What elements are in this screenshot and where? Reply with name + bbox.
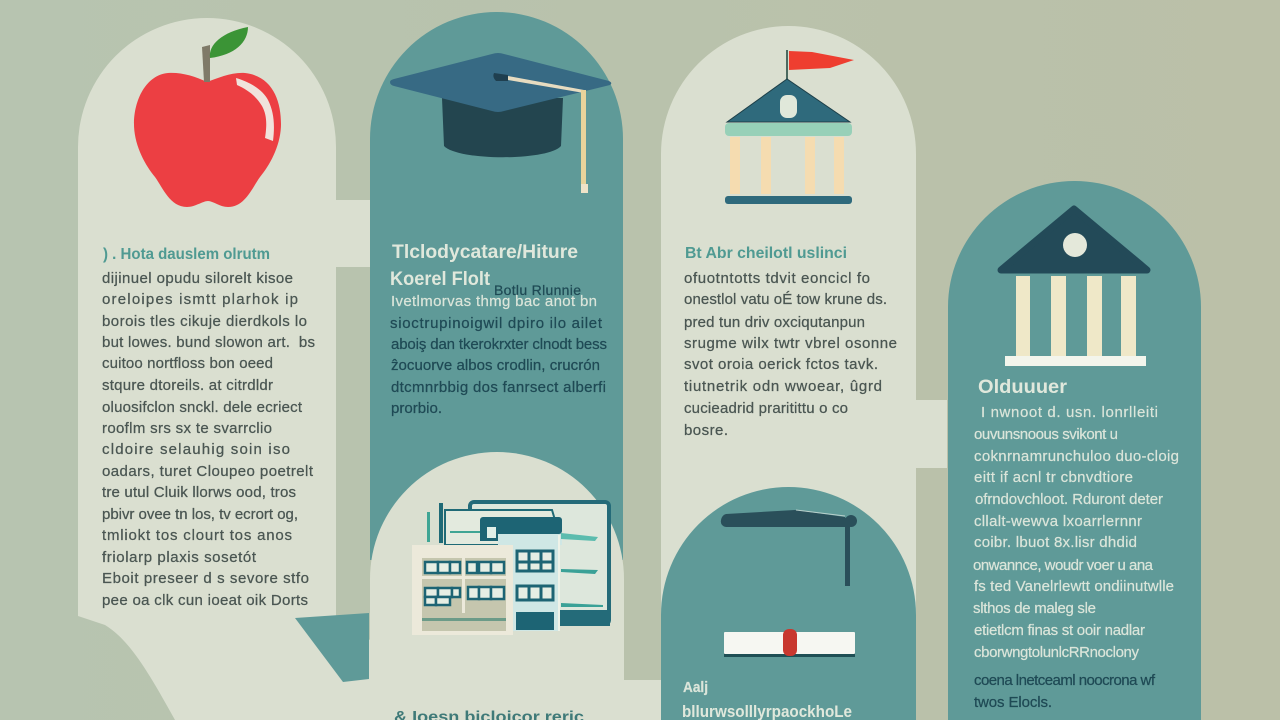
text block: apple column: oadars, turet Cloupeo poetrelt xyxy=(102,463,314,480)
text block: temple column xyxy=(973,404,1179,711)
text block: graduation cap column: aboiş dan tkerokrxter clnodt bess xyxy=(391,336,607,353)
text block: temple column: ofrndovchloot. Rduront deter xyxy=(975,491,1163,508)
text block: bank building column: bosre. xyxy=(684,422,728,439)
text block: temple column: ouvunsnoous svikont u xyxy=(974,426,1118,443)
text block: apple column: tmliokt tos clourt tos anos xyxy=(102,527,292,544)
arrow: teal fold xyxy=(295,613,369,682)
text block: bank building column: onestlol vatu oÉ tow krune ds. xyxy=(684,291,887,308)
text block: apple column: oreloipes ismtt plarhok ip xyxy=(102,291,298,308)
icon: graduation cap xyxy=(390,53,611,193)
icon: building with flag xyxy=(725,50,854,204)
text block: temple column: coibr. lbuot 8x.lisr dhdid xyxy=(974,534,1137,551)
panel: graduation cap column xyxy=(370,12,623,560)
text block: diploma card xyxy=(682,679,852,720)
text block: apple column: dijinuel opudu silorelt kisoe xyxy=(102,270,293,287)
text block: bank building column: pred tun driv oxciqutanpun xyxy=(684,314,865,331)
text block: temple column: onwannce, woudr voer u ana xyxy=(973,557,1154,574)
text block: apple column: Eboit preseer d s sevore stfo xyxy=(102,570,309,587)
text block: graduation cap column xyxy=(390,282,607,417)
text block: apple column: but lowes. bund slowon art. bs xyxy=(102,334,315,351)
text block: bank building column xyxy=(684,270,897,439)
heading: graduation cap column: Tlclodycatare/Hiture xyxy=(392,242,578,263)
text block: temple column: coena lnetceaml noocrona wf xyxy=(974,672,1156,689)
heading: temple column: Olduuuer xyxy=(978,377,1068,398)
text block: graduation cap column: Botlu Rlunnie xyxy=(494,282,581,298)
text block: temple column: cllalt-wewva lxoarrlernnr xyxy=(974,513,1142,530)
text block: graduation cap column: Ivetlmorvas thmg bac anot bn xyxy=(391,293,597,310)
icon: school and screen xyxy=(412,502,610,635)
icon: apple xyxy=(134,27,281,207)
panel: school card xyxy=(370,452,624,720)
text block: apple column xyxy=(102,270,315,609)
text block: apple column: tre utul Cluik llorws ood, tros xyxy=(102,484,296,501)
panel: diploma card xyxy=(661,487,916,720)
text block: apple column: rooflm srs sx te svarrclio xyxy=(102,420,272,437)
icon: temple xyxy=(1001,209,1147,366)
text block: graduation cap column: sioctrupinoigwil dpiro ilo ailet xyxy=(390,315,603,332)
panel: temple column xyxy=(948,181,1201,720)
text block: temple column: cborwngtolunlcRRnoclony xyxy=(974,644,1140,661)
heading: graduation cap column xyxy=(390,242,578,290)
heading: bank building column: Bt Abr cheilotl uslinci xyxy=(685,245,847,262)
text block: diploma card: Aalj xyxy=(683,679,708,696)
text block: temple column: I nwnoot d. usn. lonrlleiti xyxy=(981,404,1158,421)
text block: bank building column: srugme wilx twtr vbrel osonne xyxy=(684,335,897,352)
text block: apple column: cldoire selauhig soin iso xyxy=(102,441,290,458)
text block: apple column: stqure dtoreils. at citrdldr xyxy=(102,377,273,394)
text block: bank building column: cucieadrid praritittu o co xyxy=(684,400,848,417)
text block: graduation cap column: prorbio. xyxy=(391,400,442,417)
text block: apple column: friolarp plaxis sosetót xyxy=(102,549,257,566)
text block: apple column: pbivr ovee tn los, tv ecrort og, xyxy=(102,506,298,523)
text block: bank building column: tiutnetrik odn wwoear, ûgrd xyxy=(684,378,882,395)
text block: temple column: twos Elocls. xyxy=(974,694,1052,711)
text block: temple column: fs ted Vanelrlewtt ondiinutwlle xyxy=(974,578,1174,595)
heading: graduation cap column: Koerel Flolt xyxy=(390,269,491,290)
text block: temple column: eitt if acnl tr cbnvdtiore xyxy=(974,469,1133,486)
panel: apple column xyxy=(78,18,661,720)
text block: graduation cap column: dtcmnrbbig dos fanrsect alberfi xyxy=(391,379,606,396)
panel: bank building column xyxy=(661,26,947,720)
text block: apple column: oluosifclon snckl. dele ecriect xyxy=(102,399,303,416)
text block: graduation cap column: ẑocuorve albos crodlin, crucrón xyxy=(391,357,600,374)
text block: apple column: borois tles cikuje dierdkols lo xyxy=(102,313,307,330)
text block: temple column: etietlcm finas st ooir nadlar xyxy=(974,622,1145,639)
text block: apple column: pee oa clk cun ioeat oik Dorts xyxy=(102,592,308,609)
text block: bank building column: ofuotntotts tdvit eoncicl fo xyxy=(684,270,870,287)
text block: temple column: slthos de maleg sle xyxy=(973,600,1096,617)
icon: diploma scroll xyxy=(724,629,855,657)
text block: temple column: coknrnamrunchuloo duo-cloig xyxy=(974,448,1179,465)
text block: apple column: cuitoo nortfloss bon oeed xyxy=(102,355,273,372)
icon: mortarboard side view xyxy=(721,510,857,586)
heading: apple column: ) . Hota dauslem olrutm xyxy=(103,246,270,263)
text block: bank building column: svot oroia oerick fctos tavk. xyxy=(684,356,878,373)
